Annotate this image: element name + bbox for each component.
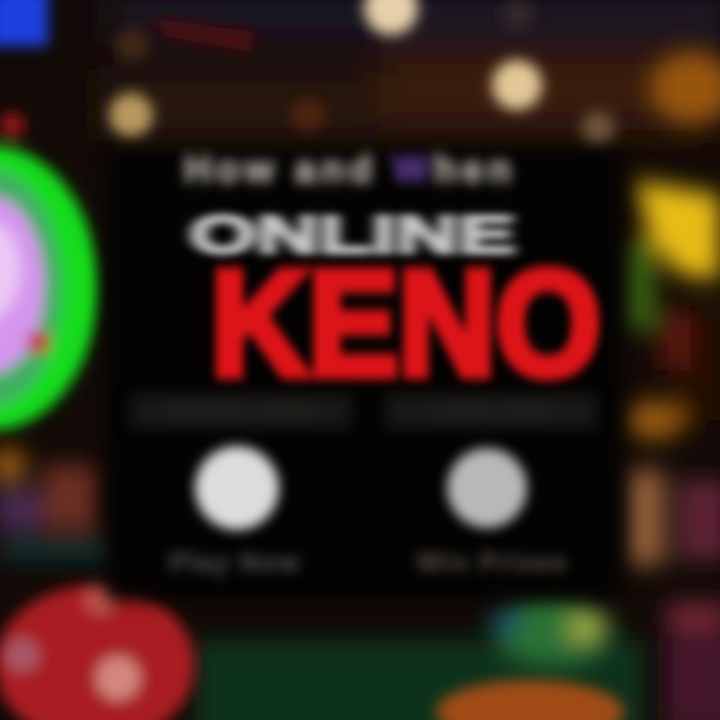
heading line 2: ONLINE <box>189 205 516 265</box>
green ball <box>490 594 613 666</box>
warm lights <box>109 0 615 145</box>
green ring <box>0 112 98 430</box>
heading line 1: How and When <box>184 149 516 191</box>
orange ball <box>436 680 624 720</box>
panel: central dark card <box>106 150 622 600</box>
bottom right chips <box>665 600 720 720</box>
orange lamp <box>650 52 720 124</box>
red ball <box>0 585 195 720</box>
lower left stack <box>0 448 120 560</box>
left caption strip <box>130 393 352 429</box>
right caption strip <box>385 393 597 429</box>
title: KENO: KENO <box>211 239 601 407</box>
right label: Win Prizes <box>417 547 568 577</box>
left label: Play Now <box>169 547 301 577</box>
green felt <box>195 640 645 720</box>
left caption strip: Numbers Game <box>167 400 315 422</box>
icon: right grey circle <box>447 448 527 528</box>
top ambient glow <box>100 0 720 140</box>
right side decor <box>625 180 720 565</box>
icon: left white circle <box>195 446 279 530</box>
right caption strip: Lottery Style <box>430 400 552 422</box>
blue light <box>0 0 48 46</box>
